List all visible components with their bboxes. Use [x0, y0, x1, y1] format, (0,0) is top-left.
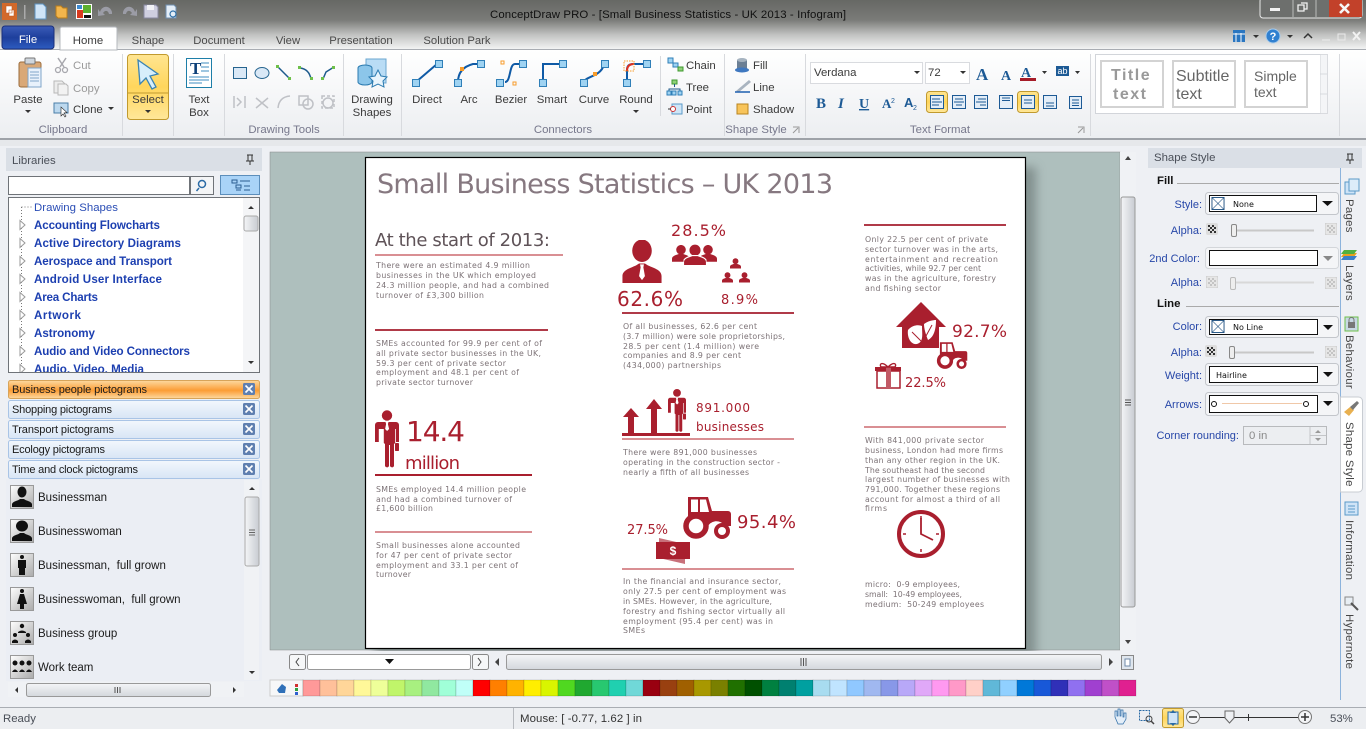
panel tabs [1340, 168, 1362, 700]
line section: No Line [1233, 323, 1263, 332]
icon: construction growth [622, 389, 690, 436]
text block: all businesses: (3.7 million) were sole proprietorships, [623, 332, 785, 341]
ribbon tabs: View [276, 35, 301, 47]
library tree: Audio, Video, Media [34, 363, 145, 376]
text block: estimated businesses: 24.3 million people, and had a combined [376, 281, 549, 290]
colour palette [270, 680, 1136, 696]
text block: SMEs share: private sector turnover [376, 378, 474, 387]
tab label: hypernote: Hypernote [1343, 614, 1355, 669]
connection modes: Point [686, 104, 713, 116]
text block: company sizes: medium: 50-249 employees [865, 600, 984, 609]
text block: finance and agriculture: in SMEs. However, in the agriculture, [623, 597, 772, 606]
line section: Color: [1173, 321, 1202, 333]
text format group: Text Format [910, 124, 971, 136]
tab label: behaviour: Behaviour [1343, 335, 1355, 389]
text box tool: Text [189, 94, 210, 106]
text block: SMEs share: employment and 48.1 per cent of [376, 368, 519, 377]
icon: farm house with leaves [896, 302, 946, 348]
icon: tractor [685, 497, 731, 537]
text style gallery: text [1113, 86, 1147, 103]
text block: construction [622, 438, 794, 477]
library tree: Android User Interface [34, 273, 163, 286]
tab label: information: Information [1343, 520, 1355, 580]
icon: businessman full figure [375, 410, 399, 467]
text box tool [186, 58, 212, 119]
line section: Hairline [1216, 371, 1247, 380]
connectors group: Direct [412, 94, 443, 106]
text style gallery: text [1254, 84, 1277, 100]
text block: small businesses: turnover [376, 570, 412, 579]
icon: banknote [656, 538, 690, 564]
text block: all businesses: 28.5 per cent (1.4 million) were [623, 342, 759, 351]
ribbon tabs [132, 35, 491, 47]
ribbon separators [122, 54, 1340, 136]
fill section: None [1233, 200, 1254, 209]
text style gallery: Title [1111, 67, 1151, 84]
help icons: ? [1270, 31, 1277, 43]
stat: 92.7%: 92.7% [952, 322, 1007, 342]
shape style group: Shadow [753, 104, 795, 116]
ribbon background [0, 50, 1366, 138]
tab icon: pages [1345, 179, 1359, 194]
status bar: Mouse: [ -0.77, 1.62 ] in [520, 713, 642, 725]
text block: finance and agriculture: employment (95.4 per cent) was in [623, 617, 773, 626]
open libraries list: Time and clock pictograms [12, 464, 138, 476]
infographic page [366, 158, 1026, 648]
tab icon: layers [1341, 250, 1357, 260]
stat: 891.000 businesses [696, 401, 764, 434]
text block: company sizes: micro: 0-9 employees, [865, 580, 960, 589]
text format group: A [904, 95, 914, 110]
Home tab [60, 27, 117, 50]
text block: SMEs share: all private sector businesses in the UK, [376, 349, 541, 358]
connection modes: Tree [686, 82, 709, 94]
connectors group: Curve [579, 94, 609, 106]
connectors group: Connectors [534, 124, 592, 136]
text block: arts turnover [864, 224, 1006, 293]
library shapes list: Businessman, full grown [38, 560, 166, 572]
text block: estimated businesses [375, 254, 563, 300]
stat: 891.000 businesses: 891.000 [696, 401, 750, 415]
icon: gift [875, 364, 901, 388]
tab icon: shape style brush [1344, 401, 1359, 416]
open libraries list [8, 380, 260, 478]
library tree: Audio and Video Connectors [34, 345, 190, 358]
fill section: Alpha: [1171, 225, 1202, 237]
text format group: A [976, 65, 989, 84]
text format group: 2 [891, 98, 895, 105]
icon: work team [672, 244, 717, 266]
text block: finance and agriculture: forestry and fishing sector virtually all [623, 607, 785, 616]
vertical scrollbar [1120, 152, 1136, 650]
text block: estimated businesses: turnover of £3,300 billion [376, 291, 484, 300]
ribbon tabs: Presentation [329, 35, 393, 47]
stat: 27.5%: 27.5% [627, 523, 668, 538]
text format group: A [1001, 69, 1012, 84]
clipboard group: Clipboard [39, 124, 87, 136]
drawing canvas background [270, 152, 1120, 650]
text block: SMEs employment: SMEs employed 14.4 million people [376, 485, 526, 494]
drawing tools group [234, 65, 335, 136]
text block: SMEs employment: £1,600 billion [376, 504, 433, 513]
line section [1156, 298, 1339, 444]
tab label: pages: Pages [1343, 199, 1355, 233]
text block: London businesses: largest number of businesses with [865, 475, 1010, 484]
shape style group [725, 58, 799, 136]
text block: small businesses: employment and 33.1 per cent of [376, 561, 518, 570]
library shapes list: Business group [38, 628, 117, 640]
text block: SMEs employment: and had a combined turnover of [376, 495, 512, 504]
text style gallery: Subtitle [1176, 68, 1229, 85]
line section: Arrows: [1165, 399, 1202, 411]
stat: 8.9%: 8.9% [721, 293, 758, 308]
shape style group: Line [753, 82, 775, 94]
help icons [1233, 29, 1360, 43]
text block: London businesses: 791,000. Together these regions [865, 485, 1000, 494]
fill section: Fill [1157, 175, 1173, 187]
stat: 28.5%: 28.5% [671, 221, 726, 240]
text format group: ab [1057, 66, 1068, 76]
status bar [0, 707, 1366, 729]
text block: finance and agriculture: only 27.5 per cent of employment was [623, 587, 786, 596]
library tree: Area Charts [34, 291, 98, 304]
open libraries list: Shopping pictograms [12, 404, 112, 416]
tab icon: information [1345, 502, 1358, 515]
library tree: Accounting Flowcharts [34, 219, 160, 232]
shape style header [1148, 148, 1362, 168]
library shapes list: Businessman [38, 492, 107, 504]
line section: Weight: [1165, 370, 1202, 382]
text block: all businesses: companies and 8.9 per cent [623, 351, 741, 360]
text block: arts turnover: was in the agriculture, forestry [865, 274, 996, 283]
stat: 62.6%: 62.6% [617, 287, 683, 311]
quick access toolbar [2, 3, 176, 20]
open libraries list: Transport pictograms [12, 424, 114, 436]
text format group: A [882, 96, 892, 111]
text style gallery: text [1176, 86, 1202, 103]
text block: London businesses: With 841,000 private sector [865, 436, 985, 445]
horizontal scrollbar and page selector [270, 651, 1136, 671]
libraries header [6, 148, 262, 171]
text format group [810, 62, 1084, 136]
clipboard group: Cut [73, 60, 92, 72]
connectors group: Smart [537, 94, 568, 106]
fill section: Alpha: [1171, 277, 1202, 289]
stat: 22.5%: 22.5% [905, 376, 946, 391]
icon: businessman bust [622, 240, 662, 283]
library shapes list: Businesswoman [38, 526, 122, 538]
text format group: 2 [913, 105, 917, 112]
library shapes list: Work team [38, 662, 93, 674]
text style gallery [1096, 54, 1328, 114]
connectors group: Bezier [495, 94, 527, 106]
heading: Small Business Statistics – UK 2013 [377, 169, 833, 200]
text block: finance and agriculture: SMEs [623, 626, 645, 635]
text format group: Verdana [814, 67, 857, 79]
panel: shape style [1148, 148, 1362, 444]
text block: finance and agriculture [622, 568, 794, 635]
clipboard group: Paste [13, 94, 43, 106]
icon: business group [722, 258, 750, 283]
text format group: 72 [928, 67, 941, 79]
Home tab: Home [73, 35, 103, 47]
drawing shapes tool: Drawing [351, 94, 393, 106]
text block: SMEs share: SMEs accounted for 99.9 per cent of of [376, 339, 542, 348]
text block: all businesses: Of all businesses, 62.6 per cent [623, 322, 757, 331]
icon: small tractor [938, 342, 967, 368]
text block: estimated businesses: businesses in the UK which employed [376, 271, 536, 280]
open libraries list: Ecology pictograms [12, 444, 106, 456]
text block: London businesses [864, 426, 1010, 513]
stat: 95.4%: 95.4% [737, 512, 796, 533]
connection modes [667, 58, 716, 116]
text block: SMEs employment [375, 474, 532, 513]
tab label: shape style: Shape Style [1343, 422, 1355, 487]
clipboard group [13, 58, 114, 136]
text format group: B [816, 96, 826, 112]
shape style group: Shape Style [725, 124, 787, 136]
stat: 14.4 million: million [405, 453, 460, 474]
shape style group: Fill [753, 60, 768, 72]
icon: banknote: $ [670, 544, 677, 558]
text block: construction: There were 891,000 businesses [622, 448, 757, 457]
shape style header: Shape Style [1154, 152, 1215, 164]
ribbon tabs: Document [193, 35, 246, 47]
tab icon: hypernote [1345, 597, 1358, 610]
text block: SMEs share [375, 329, 548, 387]
library shapes list [6, 479, 262, 697]
stat: 14.4 million: 14.4 [406, 415, 465, 448]
connection modes: Chain [686, 60, 716, 72]
text block: construction: nearly a fifth of all businesses [623, 468, 749, 477]
status bar: Ready [3, 713, 36, 725]
stat: 14.4 million [405, 415, 465, 474]
library tree [8, 198, 260, 377]
icon: clock [899, 512, 943, 556]
line section: Corner rounding: [1156, 430, 1239, 442]
text block: arts turnover: entertainment and recreation [865, 255, 998, 264]
clipboard group: Copy [73, 83, 100, 95]
text block: estimated businesses: There were an estimated 4.9 million [375, 261, 530, 270]
File tab [2, 26, 54, 49]
text block: London businesses: firms [865, 504, 887, 513]
text block: all businesses [622, 312, 794, 370]
text block: London businesses: The southeast had the second [864, 466, 985, 475]
text block: London businesses: than any other region in the UK. [865, 456, 1000, 465]
text block: London businesses: account for almost a third of all [865, 495, 1000, 504]
text block: construction: operating in the construction sector - [623, 458, 780, 467]
text block: finance and agriculture: In the financial and insurance sector, [623, 577, 781, 586]
text block: company sizes [865, 580, 984, 609]
zoom controls [1115, 708, 1353, 728]
text style gallery: Simple [1254, 68, 1297, 84]
tab icon: behaviour [1345, 317, 1358, 331]
ribbon tabs: Solution Park [423, 35, 491, 47]
stat: 891.000 businesses: businesses [696, 420, 764, 434]
zoom controls: 53% [1330, 713, 1353, 725]
connectors group: Arc [460, 94, 478, 106]
tab label: layers: Layers [1343, 265, 1355, 301]
text block: small businesses: Small businesses alone accounted [376, 541, 520, 550]
open libraries list: Business people pictograms [12, 384, 148, 396]
text block: London businesses: business, London had more firms [865, 446, 1003, 455]
drawing shapes tool [351, 59, 393, 119]
page shadow [375, 167, 1036, 659]
library tree: Astronomy [34, 327, 96, 340]
text block: arts turnover: Only 22.5 per cent of private [865, 235, 988, 244]
File tab: File [19, 34, 37, 46]
text block: company sizes: small: 10-49 employees, [865, 590, 962, 599]
connectors group: Round [619, 94, 653, 106]
fill section: 2nd Color: [1149, 253, 1200, 265]
text block: arts turnover: sector turnover was in the arts, [865, 245, 998, 254]
text box tool: T [190, 59, 202, 78]
panel: libraries [6, 148, 262, 697]
libraries header: Libraries [12, 155, 56, 167]
line section: Line [1157, 298, 1180, 310]
subheading: At the start of 2013: [375, 230, 550, 251]
window controls [1260, 0, 1362, 18]
text block: small businesses: for 47 per cent of private sector [376, 551, 513, 560]
library shapes list: Businesswoman, full grown [38, 594, 181, 606]
title bar and tab strip background [0, 0, 1366, 50]
text format group: A [1021, 66, 1032, 81]
select button [128, 54, 168, 120]
ribbon tabs: Shape [132, 35, 164, 47]
line section: Alpha: [1171, 347, 1202, 359]
text format group: U [859, 97, 869, 112]
drawing shapes tool: Shapes [353, 107, 392, 119]
library tree: Aerospace and Transport [34, 255, 172, 268]
text block: SMEs share: 59.3 per cent of private sector [376, 359, 507, 368]
text block: arts turnover: activities, while 92.7 per cent [865, 264, 981, 273]
fill section: Style: [1174, 199, 1202, 211]
window title: ConceptDraw PRO - [Small Business Statistics - UK 2013 - Infogram] [490, 9, 846, 21]
library search [8, 176, 260, 194]
text block: small businesses [375, 531, 532, 579]
text block: arts turnover: and fishing sector [865, 284, 942, 293]
library tree: Active Directory Diagrams [34, 237, 181, 250]
select button: Select [132, 94, 165, 106]
connectors group [412, 60, 653, 136]
text format group: I [837, 96, 845, 112]
clipboard group: Clone [73, 104, 103, 116]
library tree: Drawing Shapes [34, 202, 118, 214]
fill section [1149, 175, 1339, 290]
line section: 0 in [1249, 430, 1267, 442]
text box tool: Box [189, 107, 209, 119]
text block: all businesses: (434,000) partnerships [623, 361, 721, 370]
library tree: Artwork [34, 309, 82, 322]
drawing tools group: Drawing Tools [248, 124, 320, 136]
